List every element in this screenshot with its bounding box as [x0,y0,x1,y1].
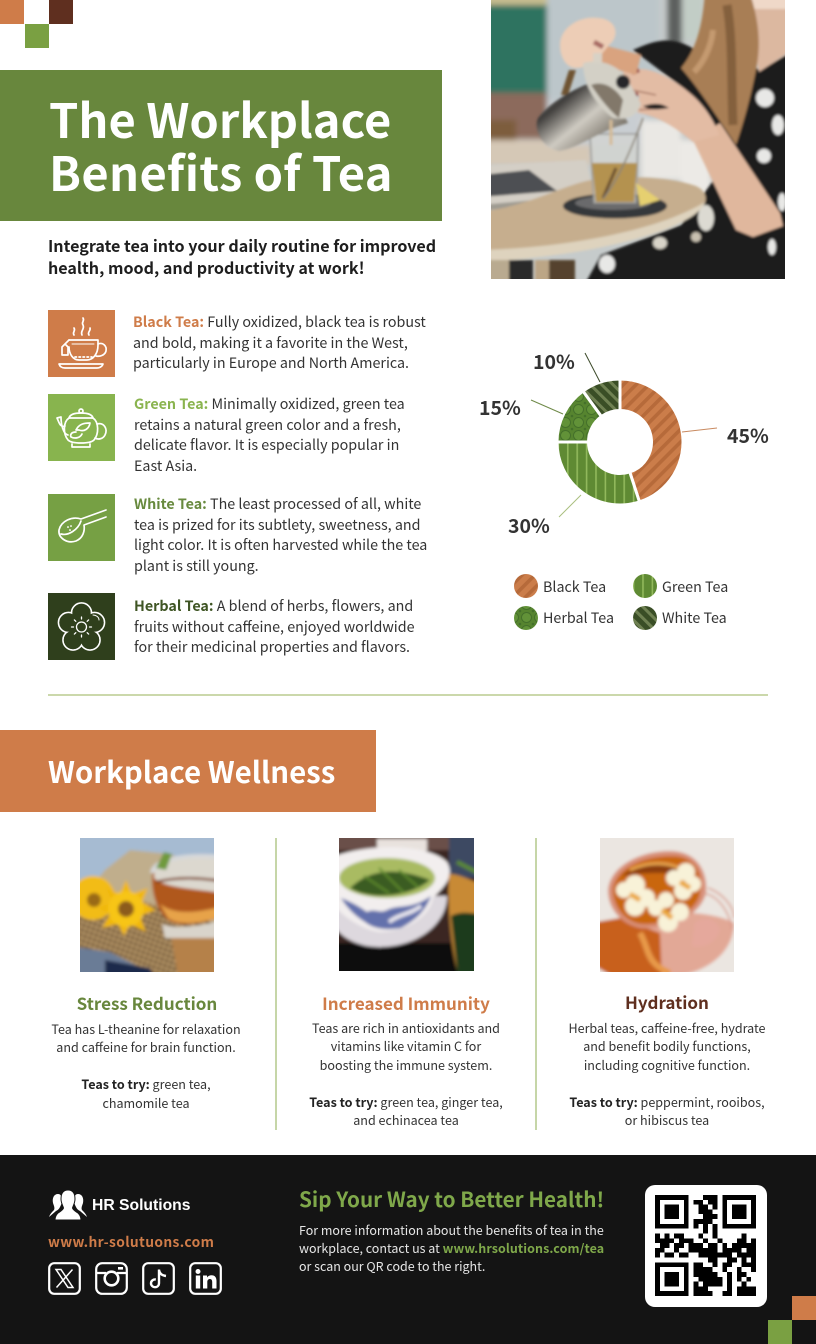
body: stress reduction [51,1019,241,1112]
icon: TikTok [142,1262,175,1295]
legend labels: white tea: White Tea [662,607,727,628]
text: black tea: Black Tea: Fully oxidized, black tea is robust [133,311,426,332]
text: white tea: plant is still young. [134,554,259,576]
footer [0,1155,816,1344]
text: black tea: particularly in Europe and North America. [133,352,409,373]
french press [561,70,576,95]
section heading: Workplace Wellness [48,750,335,792]
text: green tea [134,393,405,476]
donut chart [530,352,718,518]
body: increased immunity: Teas are rich in antioxidants and [312,1018,500,1037]
title banner [0,70,442,221]
title [49,83,393,205]
column text: increased immunity [309,990,503,1129]
segment: white tea 10% [583,379,620,417]
icon: LinkedIn [189,1262,222,1295]
body: increased immunity: vitamins like vitamin C for [331,1036,481,1055]
QR code [645,1185,767,1307]
column text: stress reduction [51,990,241,1112]
column text: hydration [568,989,766,1129]
heading: hydration: Hydration [625,989,709,1014]
body: increased immunity: and echinacea tea [353,1110,459,1129]
website: www.hr-solutuons.com [48,1231,214,1251]
body: stress reduction: and caffeine for brain function. [56,1037,236,1056]
subtitle: health, mood, and productivity at work! [48,255,365,279]
footer body [299,1221,604,1275]
footer body: For more information about the benefits of tea in the [299,1221,604,1239]
text: herbal tea [134,595,415,657]
dress [586,38,785,279]
body: hydration: or hibiscus tea [625,1110,709,1129]
saucer [563,194,667,218]
text: white tea [134,493,427,576]
left arm [601,45,641,75]
flower [80,874,115,922]
item: herbal tea [48,593,415,660]
photo: green tea in porcelain cup [339,838,474,971]
text: herbal tea: Herbal Tea: A blend of herbs, flowers, and [134,595,413,616]
right arm [693,123,783,237]
legend labels: herbal tea: Herbal Tea [543,607,614,628]
text: white tea: light color. It is often harvested while the tea [134,534,427,555]
legend labels: black tea: Black Tea [543,576,606,597]
photo: tea with yellow flowers [80,838,214,972]
segment: black tea 45% [620,379,683,502]
body: increased immunity [309,1018,503,1129]
text: herbal tea: for their medicinal properties and flavors. [134,636,410,657]
title: Benefits of Tea [49,136,393,205]
neck [754,8,785,74]
icon: Instagram [95,1262,128,1295]
text: white tea: tea is prized for its subtlety, sweetness, and [134,514,420,534]
text: green tea: delicate flavor. It is especially popular in [134,434,399,455]
item: black tea [48,310,426,377]
body: hydration: Teas to try: peppermint, rooibos, [569,1092,765,1111]
icon: tea cup [48,310,115,377]
body: hydration: and benefit bodily functions, [583,1036,751,1055]
text: green tea: East Asia. [134,454,197,476]
segment: herbal tea 15% [557,391,601,442]
value label: 15%: 15% [479,392,521,421]
cup [150,872,214,925]
leader lines [531,353,717,517]
body: hydration: including cognitive function. [584,1055,750,1074]
body: stress reduction: Teas to try: green tea, [81,1074,211,1093]
item: white tea [48,493,427,576]
item: green tea [48,393,405,476]
footer body: workplace, contact us at www.hrsolutions.com/tea [299,1239,604,1257]
lemon [636,183,660,206]
icon: spoon [48,494,115,561]
legend swatches [514,574,657,630]
text: herbal tea: fruits without caffeine, enjoyed worldwide [134,616,415,636]
icon: flower [48,593,115,660]
logo icon: people [49,1190,87,1220]
heading: increased immunity: Increased Immunity [322,990,490,1015]
section banner: workplace wellness [0,730,376,812]
legend [514,574,728,630]
polka dots [756,89,774,107]
laptop [491,160,590,204]
footer body: or scan our QR code to the right. [299,1257,485,1275]
title: The Workplace [49,83,391,152]
photo: amber tea with jasmine flowers [600,838,734,972]
footer heading: Sip Your Way to Better Health! [299,1183,604,1213]
subtitle: Integrate tea into your daily routine for improved [48,233,436,257]
body: hydration: Herbal teas, caffeine-free, hydrate [568,1018,766,1037]
text: black tea [133,311,426,373]
body: stress reduction: chamomile tea [102,1093,190,1112]
body: hydration [568,1018,766,1129]
icon: X [48,1262,81,1295]
subtitle [48,233,436,279]
text: black tea: and bold, making it a favorite in the West, [133,332,408,352]
body: stress reduction: Tea has L-theanine for relaxation [51,1019,241,1038]
segment: green tea 30% [557,442,639,505]
body: increased immunity: Teas to try: green tea, ginger tea, [309,1092,503,1111]
flowers [616,863,701,932]
value label: 10%: 10% [533,346,575,375]
logo text: HR Solutions [92,1197,190,1214]
photo: woman pouring tea at a table [491,0,785,279]
body: increased immunity: boosting the immune system. [320,1055,492,1074]
glass [590,134,638,203]
text: white tea: White Tea: The least processed of all, white [134,493,421,514]
value label: 45%: 45% [727,420,769,449]
left hand [560,18,616,68]
text: green tea: retains a natural green color and a fresh, [134,414,401,434]
hair [681,0,759,145]
table [491,176,708,251]
icon: teapot [48,394,115,461]
text: green tea: Green Tea: Minimally oxidized, green tea [134,393,405,414]
decorative squares: top left [0,0,73,48]
heading: stress reduction: Stress Reduction [77,990,217,1015]
value label: 30%: 30% [508,510,550,539]
legend labels: green tea: Green Tea [662,576,728,597]
decorative squares: bottom right [768,1296,816,1344]
